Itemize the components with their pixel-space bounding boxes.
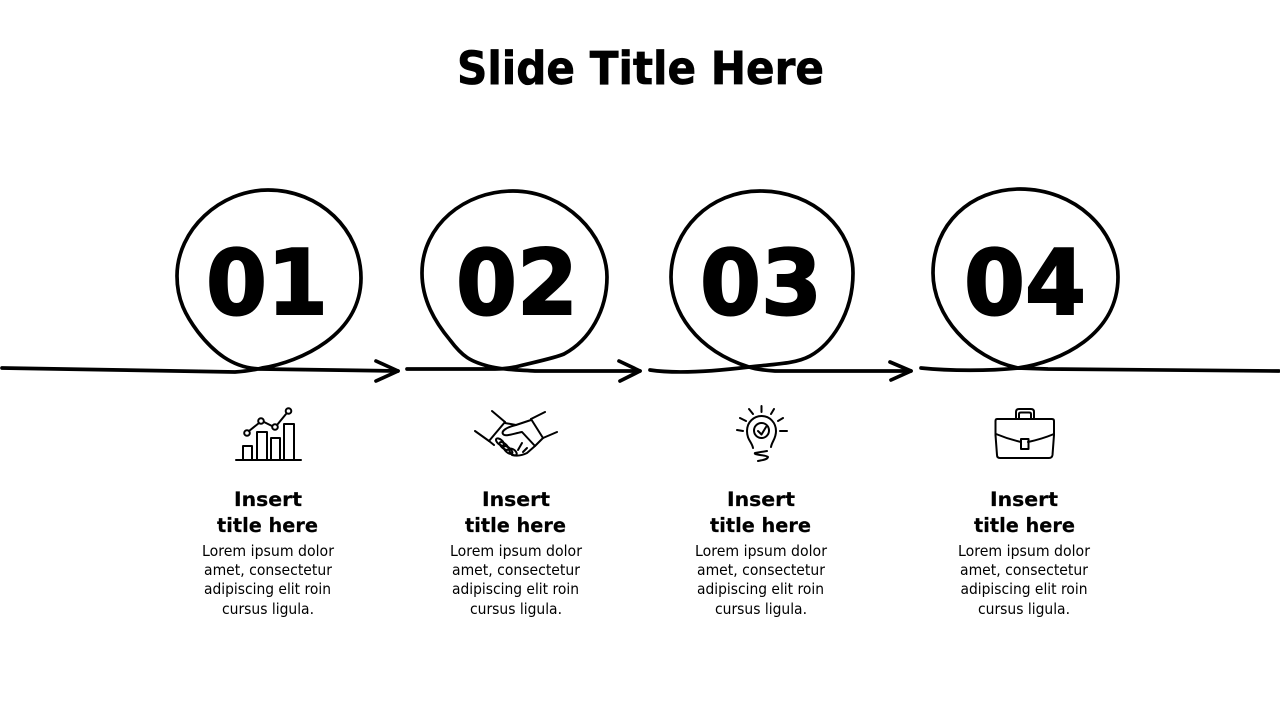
step 2 heading: title here (465, 514, 566, 537)
step 2 body text: amet, consectetur (452, 561, 581, 579)
step 3 body text: amet, consectetur (697, 561, 826, 579)
looped arrow 3 (650, 191, 911, 380)
step 1 heading: title here (217, 514, 318, 537)
step 3 heading (710, 488, 811, 537)
step 2 body text: adipiscing elit roin (452, 580, 579, 598)
number 04: 04 (964, 231, 1086, 336)
step 2 heading (465, 488, 566, 537)
looped arrow 2 (407, 191, 640, 381)
step 2 heading: Insert (482, 488, 550, 511)
number 03: 03 (700, 231, 822, 336)
step 4 body text: Lorem ipsum dolor (958, 542, 1091, 560)
step 1 body text: cursus ligula. (222, 600, 314, 618)
step 1 body text: Lorem ipsum dolor (202, 542, 335, 560)
icon: handshake (475, 411, 557, 457)
step 2 body text: Lorem ipsum dolor (450, 542, 583, 560)
step 4 body text: cursus ligula. (978, 600, 1070, 618)
step 3 body text: cursus ligula. (715, 600, 807, 618)
step 2 (407, 191, 640, 618)
step 4 body text: adipiscing elit roin (960, 580, 1088, 598)
step 1 heading: Insert (234, 488, 302, 511)
icon: bar chart with trend line (236, 408, 301, 460)
step 3 (650, 191, 911, 618)
step 4 body text (958, 542, 1091, 618)
title: Slide Title Here (457, 42, 824, 95)
step 1 body text: adipiscing elit roin (204, 580, 331, 598)
step 3 body text: adipiscing elit roin (697, 580, 824, 598)
step 2 body text (450, 542, 583, 618)
step 3 body text: Lorem ipsum dolor (695, 542, 828, 560)
step 1 body text: amet, consectetur (204, 561, 333, 579)
step 3 heading: title here (710, 514, 811, 537)
step 1 (2, 190, 398, 618)
step 4 body text: amet, consectetur (960, 561, 1089, 579)
looped line 4 (921, 189, 1279, 371)
step 4 heading: Insert (990, 488, 1058, 511)
number 02: 02 (456, 231, 578, 336)
step 4 (921, 189, 1279, 618)
icon: briefcase (996, 409, 1054, 458)
looped arrow 1 (2, 190, 398, 381)
step 1 body text (202, 542, 335, 618)
number 01: 01 (206, 231, 328, 336)
step 1 heading (217, 488, 318, 537)
step 4 heading: title here (974, 514, 1075, 537)
step 4 heading (974, 488, 1075, 537)
step 3 body text (695, 542, 828, 618)
icon: light bulb with check (737, 406, 787, 461)
step 2 body text: cursus ligula. (470, 600, 562, 618)
step 3 heading: Insert (727, 488, 795, 511)
